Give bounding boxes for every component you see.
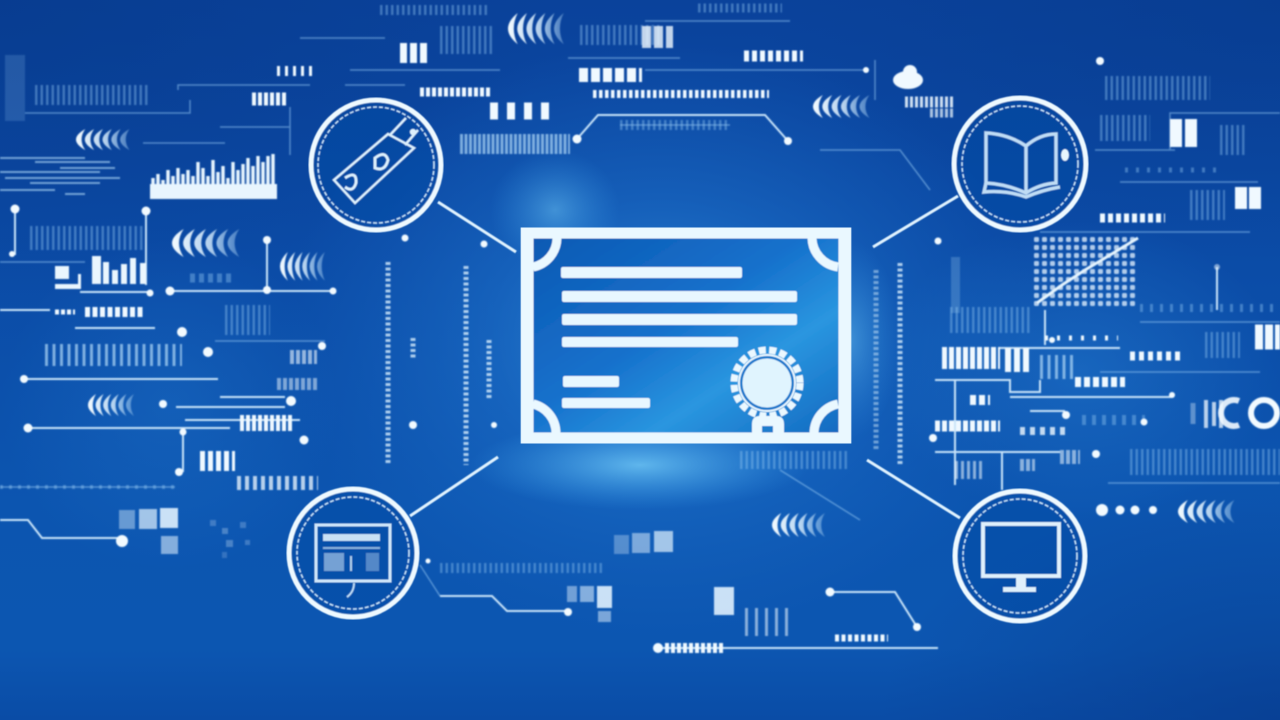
faint bar fields: [0, 8, 1280, 568]
mid bars left: [45, 144, 1075, 367]
certificate seal: [734, 350, 800, 433]
streaked text lines upper left: [0, 158, 120, 194]
node dots: [9, 57, 1220, 653]
icon circle: price tag: [311, 100, 441, 230]
icon circle: open book: [954, 98, 1086, 230]
icon circle: monitor: [955, 491, 1085, 621]
connectors: [410, 196, 960, 518]
chevron clusters: [76, 13, 1234, 537]
right ring glyphs: [1193, 400, 1277, 428]
icon: cloud: [893, 65, 923, 89]
small squares: [119, 508, 734, 622]
certificate text lines: [561, 267, 797, 408]
small bar chart with icon: [55, 256, 146, 289]
icon circle: web page: [289, 489, 417, 617]
vertical dotted lines: [388, 262, 900, 465]
bright circuit lines: [0, 115, 1217, 648]
certificate corners: [533, 238, 838, 433]
dot grid chart: [1033, 236, 1138, 308]
bar chart: upper left: [150, 154, 277, 199]
faint circuit lines: [0, 21, 1280, 596]
panel: certificate: [527, 232, 845, 439]
